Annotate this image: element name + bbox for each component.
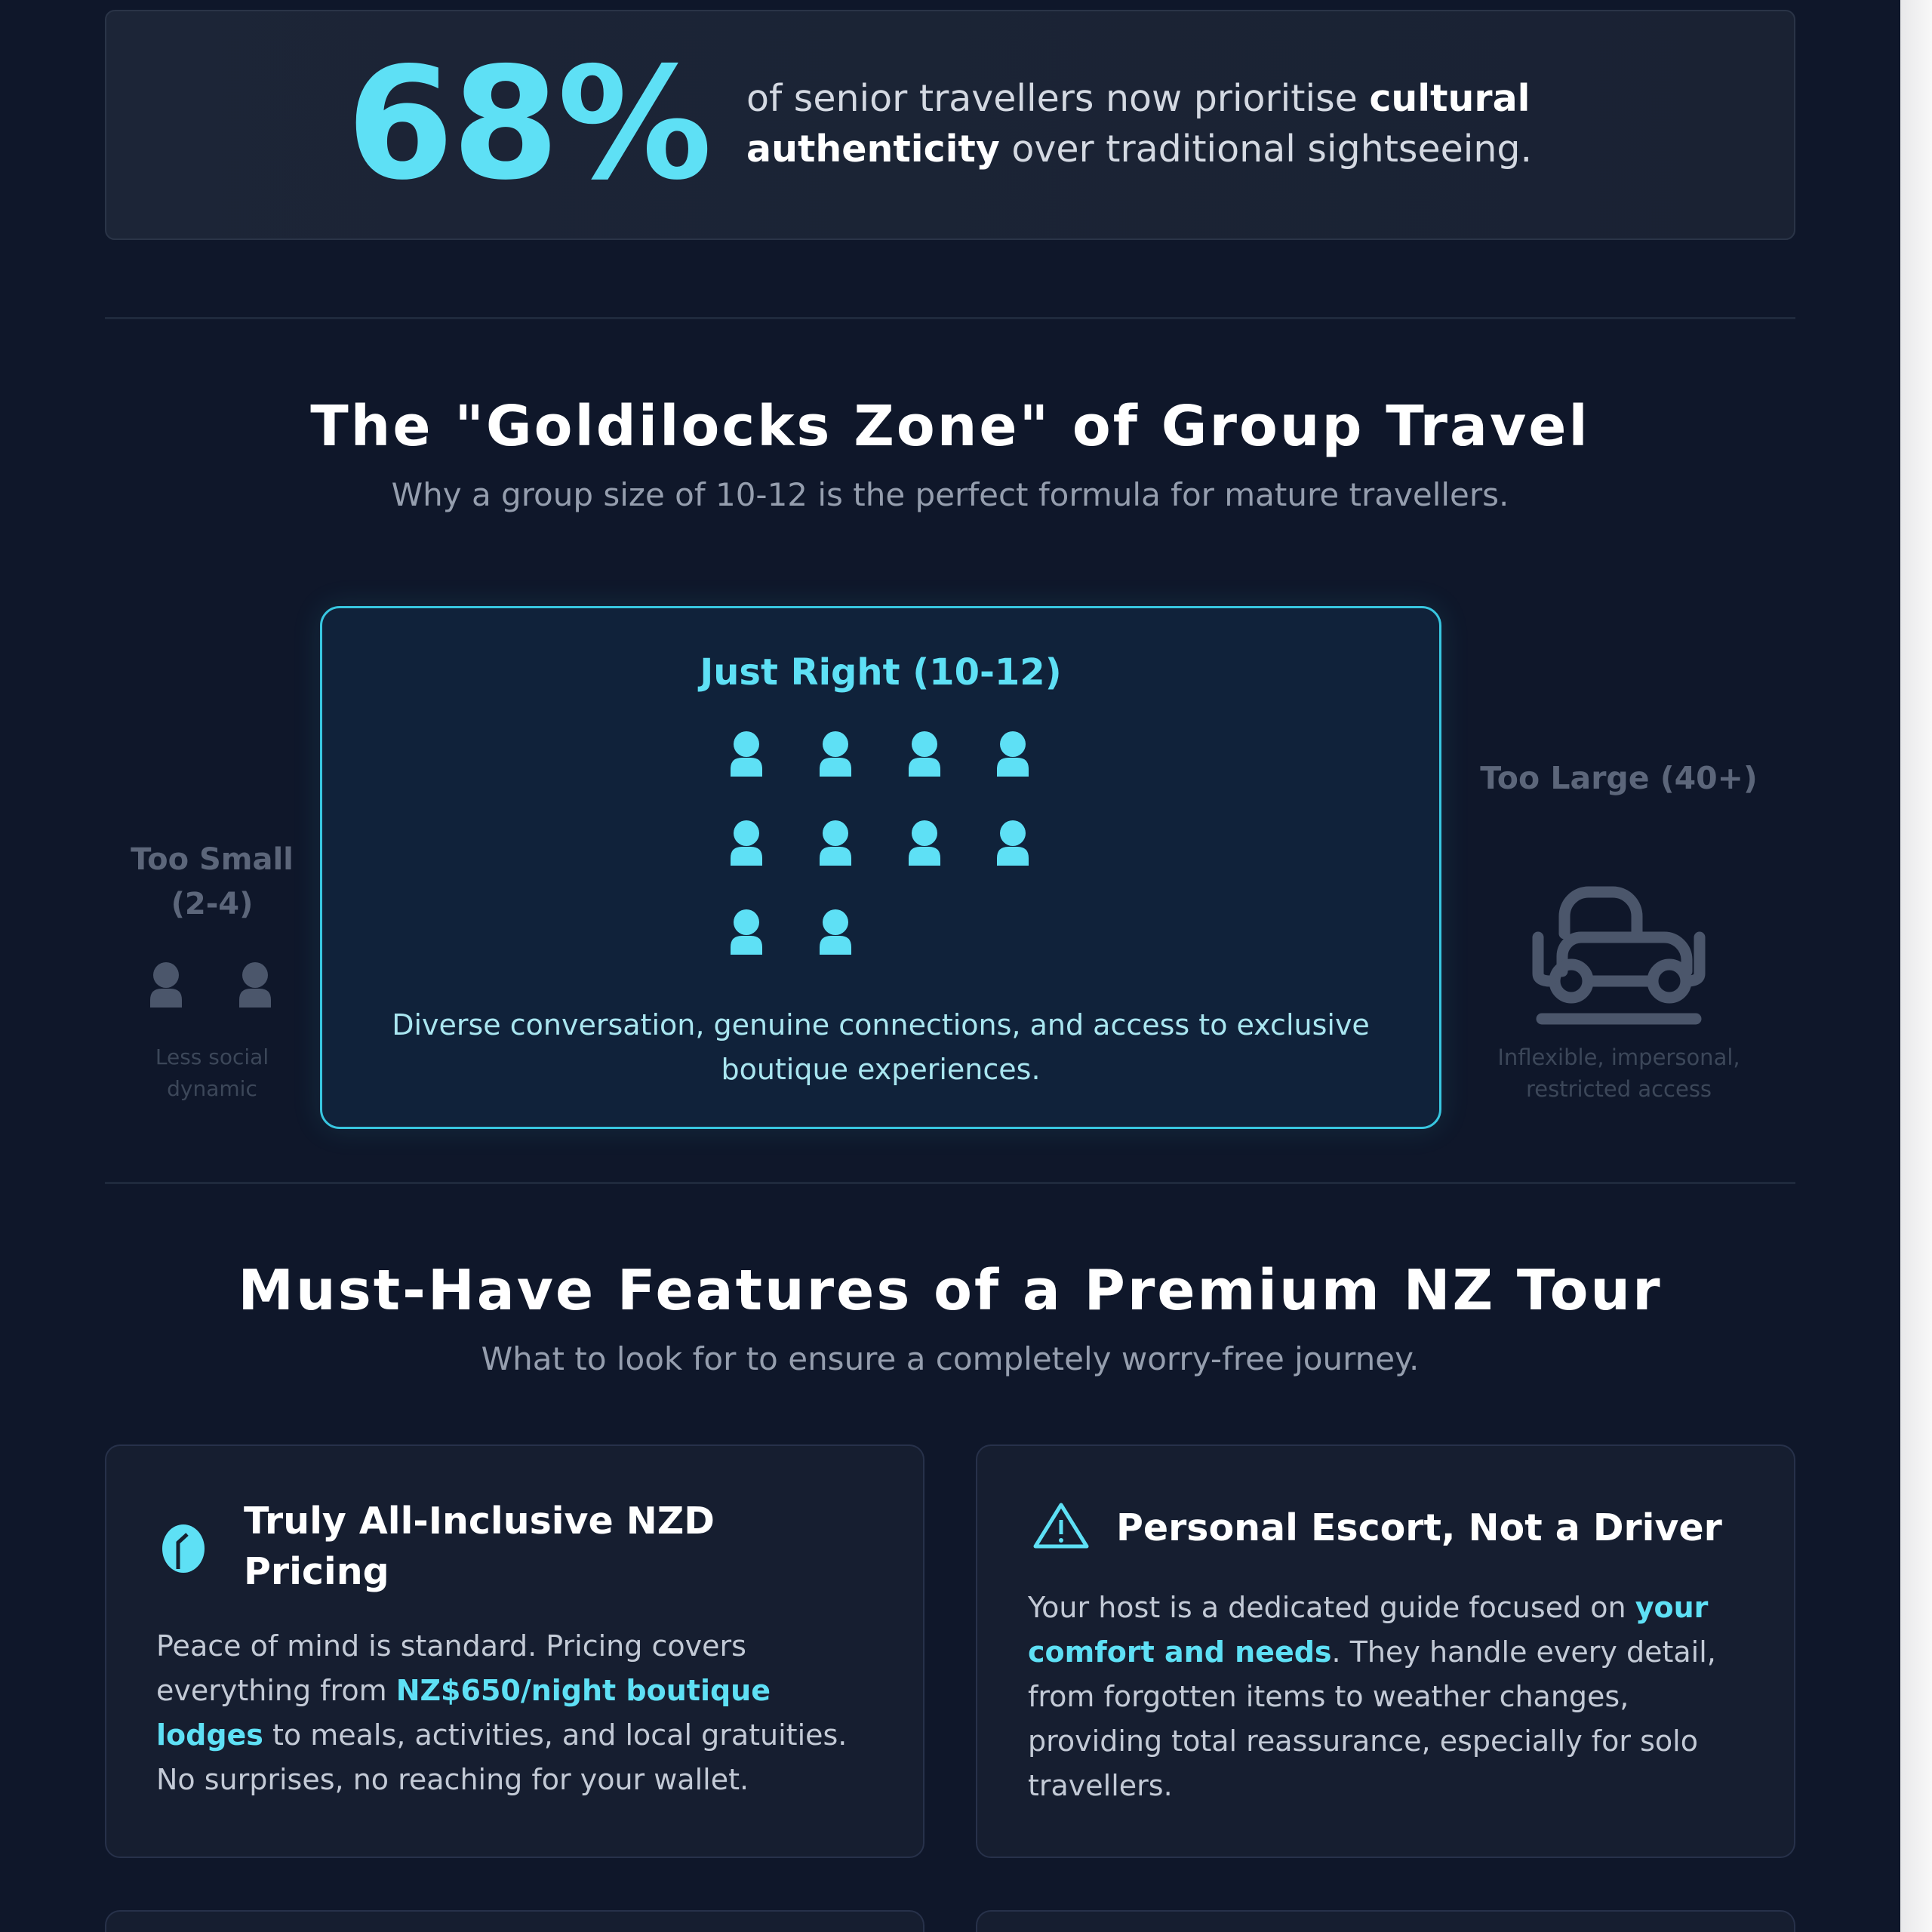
description just right: Diverse conversation, genuine connections, and access to exclusive boutique experiences. <box>392 1008 1370 1086</box>
icon: two people <box>150 962 271 1008</box>
subtitle: Goldilocks: Why a group size of 10-12 is the perfect formula for mature travellers. <box>392 476 1509 513</box>
subtitle: features: What to look for to ensure a completely worry-free journey. <box>481 1340 1419 1377</box>
title: Truly All-Inclusive NZD Pricing <box>244 1500 715 1593</box>
icon: car/bus <box>1532 886 1706 1025</box>
heading: Goldilocks: The "Goldilocks Zone" of Group Travel <box>310 394 1590 459</box>
body: Your host is a dedicated guide focused on your comfort and needs. They handle every detail, from forgotten items to weather changes, providing total reassurance, especially for solo travellers. <box>1028 1591 1716 1802</box>
title: Personal Escort, Not a Driver <box>1116 1506 1722 1549</box>
card: next left (partial) <box>105 1910 924 1932</box>
body: Peace of mind is standard. Pricing covers everything from NZ$650/night boutique lodges to meals, activities, and local gratuities. No surprises, no reaching for your wallet. <box>156 1629 847 1796</box>
icon: cyan coin <box>162 1524 205 1573</box>
scrollbar strip <box>1900 0 1932 1932</box>
caption too large: Inflexible, impersonal, restricted access <box>1497 1044 1740 1102</box>
label too small: Too Small (2-4) <box>131 842 294 921</box>
label too large: Too Large (40+) <box>1480 760 1758 796</box>
panel: too small <box>131 842 294 1101</box>
caption too small: Less social dynamic <box>155 1044 269 1101</box>
stat text: of senior travellers now prioritise cultural authenticity over traditional sightseeing. <box>746 77 1532 171</box>
card: personal escort <box>976 1444 1795 1858</box>
icon grid: 10 people <box>731 731 1029 955</box>
card: all-inclusive pricing <box>105 1444 924 1858</box>
label just right: Just Right (10-12) <box>700 651 1062 694</box>
stat panel <box>105 10 1795 240</box>
card: next right (partial) <box>976 1910 1795 1932</box>
icon: warning triangle <box>1034 1503 1088 1549</box>
heading: features: Must-Have Features of a Premium NZ Tour <box>238 1258 1663 1323</box>
panel: just right <box>320 606 1441 1129</box>
panel: too large <box>1480 760 1758 1102</box>
big number 68%: 68% <box>346 35 710 214</box>
